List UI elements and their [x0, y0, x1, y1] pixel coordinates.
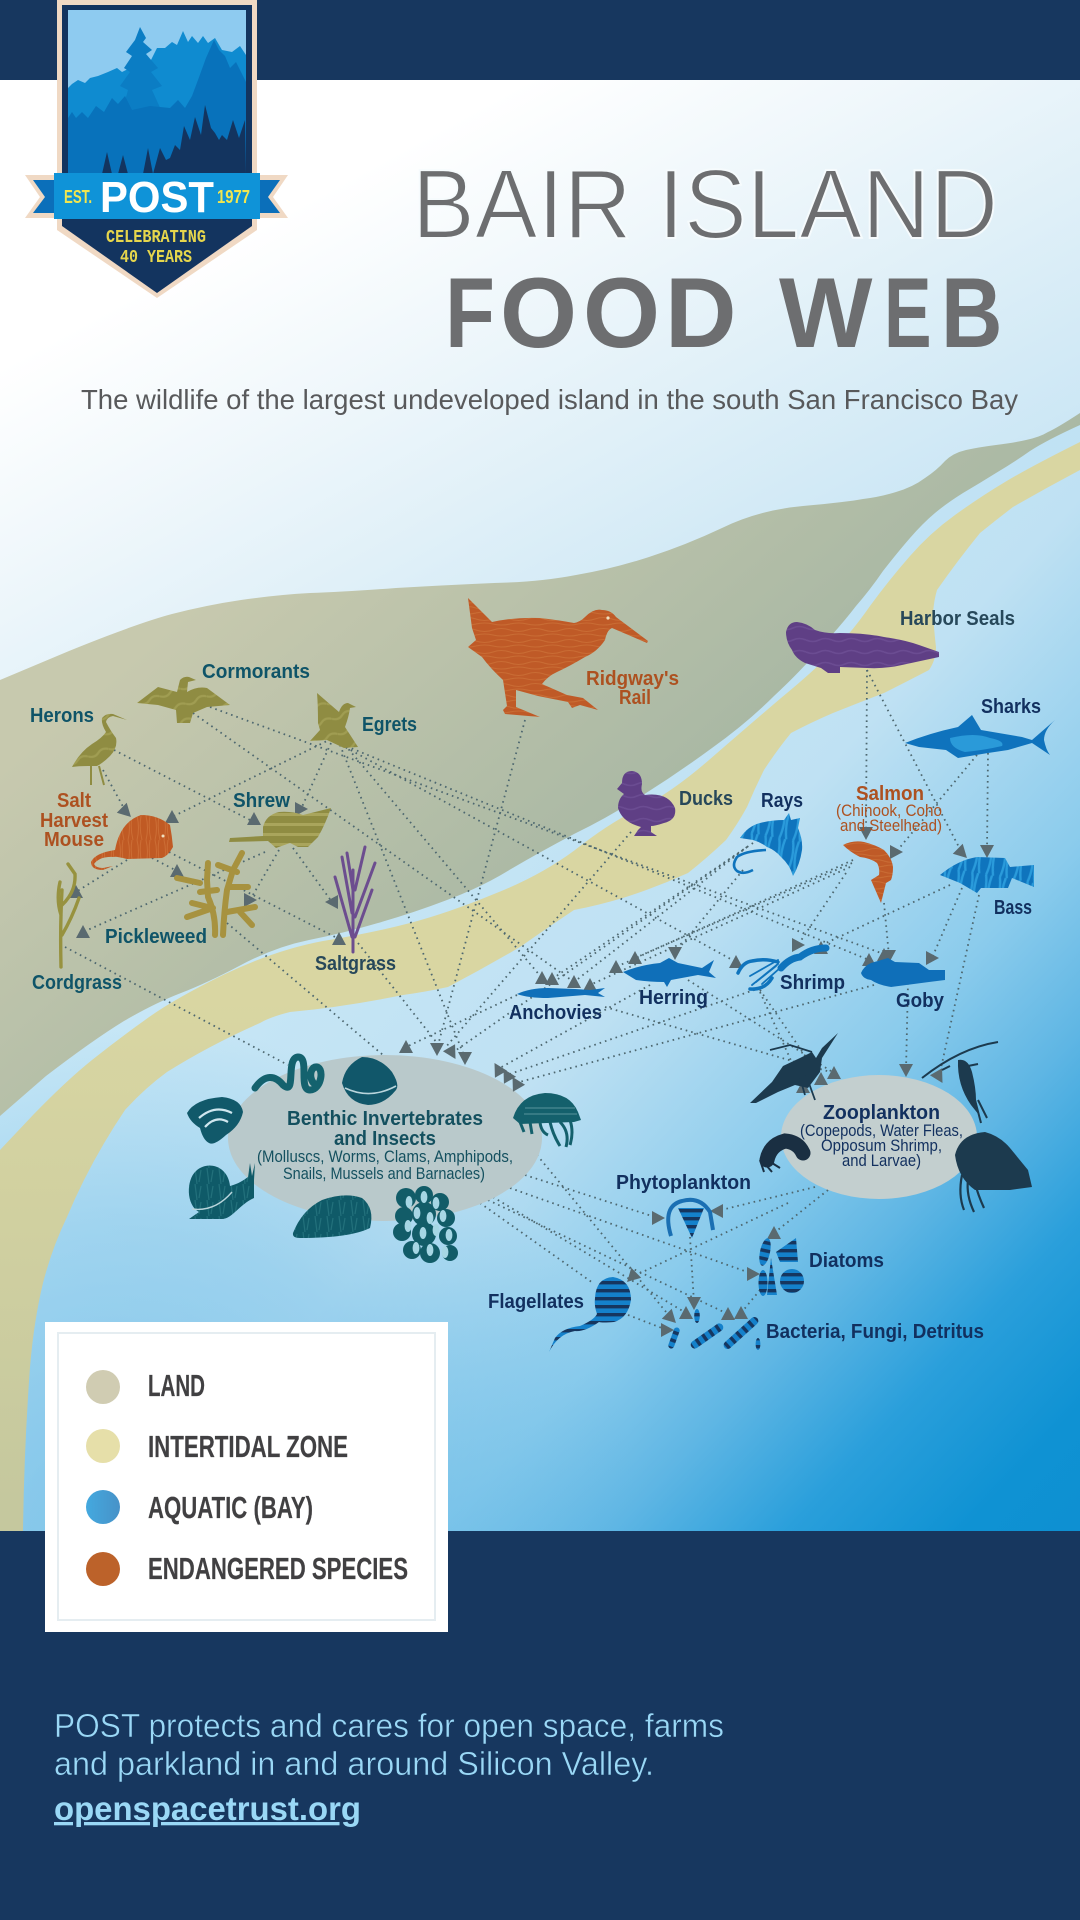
intertidal zone	[0, 442, 1080, 1532]
subtitle: The wildlife of the largest undeveloped island in the south San Francisco Bay	[81, 384, 1018, 415]
ellipse: zooplankton	[781, 1075, 977, 1199]
label: Cordgrass: Cordgrass	[32, 972, 122, 994]
title: F	[445, 258, 495, 369]
label: Bass: Bass	[994, 897, 1032, 919]
title: W	[779, 257, 873, 368]
label: Benthic Invertebrates and Insects: Snails, Mussels and Barnacles)	[283, 1164, 485, 1183]
label: Rays: Rays	[761, 790, 803, 812]
icon: Ridgway's rail	[468, 598, 648, 717]
icon: cordgrass	[58, 864, 79, 967]
title: E	[884, 259, 931, 369]
label: Bacteria, Fungi, Detritus: Bacteria, Fungi, Detritus	[766, 1321, 984, 1343]
icon: shrew	[229, 808, 331, 848]
label: Zooplankton: (Copepods, Water Fleas,	[800, 1121, 963, 1140]
label: Zooplankton: Zooplankton	[823, 1102, 940, 1124]
ellipse: benthic invertebrates	[228, 1055, 542, 1221]
top navy band	[0, 0, 1080, 81]
icon: salt harvest mouse	[91, 815, 173, 870]
label: Zooplankton: Opposum Shrimp,	[821, 1136, 942, 1155]
shield navy	[62, 5, 252, 293]
legend: aquatic bay	[86, 1490, 313, 1525]
ribbon	[54, 173, 260, 219]
label: Benthic Invertebrates and Insects: (Molluscs, Worms, Clams, Amphipods,	[257, 1147, 513, 1166]
label: Phytoplankton: Phytoplankton	[616, 1172, 751, 1194]
label: Saltgrass: Saltgrass	[315, 953, 396, 975]
land area	[0, 413, 1080, 1116]
icon: water flea	[955, 1132, 1032, 1212]
icon: duck	[617, 771, 675, 836]
footer text: POST protects and cares for open space, farms	[54, 1707, 724, 1744]
food web connecting lines	[65, 670, 988, 1330]
logo text: POST	[100, 173, 214, 222]
icon: salmon	[843, 841, 893, 903]
label: Egrets: Egrets	[362, 714, 417, 736]
label: Ridgway's Rail: Ridgway's	[586, 668, 679, 690]
aquatic bay background	[0, 420, 1080, 1532]
icon: snail	[189, 1163, 255, 1219]
title: B	[941, 257, 1002, 368]
label: Zooplankton	[800, 1102, 963, 1170]
icon: mussel	[293, 1195, 371, 1238]
label: Benthic Invertebrates and Insects	[257, 1108, 513, 1183]
label: Diatoms: Diatoms	[809, 1250, 884, 1272]
shield outline	[57, 0, 257, 298]
icon: larva	[760, 1141, 803, 1172]
icon: saltgrass	[335, 847, 375, 952]
legend: intertidal zone: INTERTIDAL ZONE	[148, 1429, 348, 1464]
label: Cormorants: Cormorants	[202, 661, 310, 683]
label: Anchovies: Anchovies	[509, 1002, 602, 1024]
legend: endangered species: ENDANGERED SPECIES	[148, 1551, 408, 1586]
icon: opossum shrimp	[750, 1033, 838, 1103]
arrowheads	[69, 802, 994, 1337]
icon: shrimp	[738, 948, 826, 989]
icon: clam	[342, 1057, 397, 1105]
title	[412, 149, 1002, 369]
icon: copepod	[922, 1042, 998, 1123]
icon: egret	[310, 693, 358, 748]
icon: harbor seal	[786, 622, 939, 673]
forest scene	[68, 10, 246, 175]
bay depth shading	[0, 1020, 640, 1532]
icon: ray	[734, 813, 802, 876]
label: Shrew: Shrew	[233, 790, 290, 812]
label: Salt Harvest Mouse: Salt	[57, 790, 91, 812]
label: Ridgway's Rail: Rail	[619, 687, 651, 709]
logo badge	[25, 0, 288, 298]
icon: phytoplankton	[668, 1200, 713, 1238]
icon: bacteria	[667, 1309, 760, 1351]
label: Harbor Seals: Harbor Seals	[900, 608, 1015, 630]
footer band	[0, 1531, 1080, 1920]
title: BAIR ISLAND	[412, 149, 998, 259]
icon: flagellate	[549, 1277, 631, 1352]
label: Herring: Herring	[639, 987, 708, 1009]
icon: pickleweed	[177, 853, 255, 935]
legend: land	[86, 1368, 205, 1404]
footer text	[54, 1707, 724, 1827]
icon: amphipod	[513, 1093, 581, 1147]
ribbon tails	[25, 175, 288, 218]
legend: land: LAND	[148, 1368, 205, 1403]
label: Salt Harvest Mouse: Harvest	[40, 810, 108, 832]
label: Ducks: Ducks	[679, 788, 733, 810]
icon: bass	[940, 857, 1034, 893]
label: Salt Harvest Mouse	[40, 790, 108, 851]
label: Zooplankton: and Larvae)	[842, 1151, 921, 1170]
footer text: openspacetrust.org	[54, 1790, 361, 1827]
label: Salmon	[836, 783, 942, 835]
label: Sharks: Sharks	[981, 696, 1041, 718]
label: Salt Harvest Mouse: Mouse	[44, 829, 104, 851]
label: Benthic Invertebrates and Insects: Benthic Invertebrates	[287, 1108, 483, 1130]
icon: shark	[905, 715, 1055, 758]
label: Herons: Herons	[30, 705, 94, 727]
icon: worm	[255, 1057, 321, 1090]
icon: goby	[861, 958, 945, 987]
icon: anchovies	[517, 988, 605, 998]
icon: barnacles	[393, 1186, 458, 1263]
label: Salmon: and Steelhead)	[840, 816, 942, 835]
legend: intertidal zone	[86, 1429, 348, 1464]
label: Shrimp: Shrimp	[780, 972, 845, 994]
label: Benthic Invertebrates and Insects: and Insects	[334, 1128, 436, 1150]
label: Ridgway's Rail	[586, 668, 679, 709]
icon: heron	[72, 714, 127, 785]
logo celebrating: CELEBRATING	[106, 228, 206, 248]
label: Flagellates: Flagellates	[488, 1291, 584, 1313]
logo est: EST.	[64, 187, 92, 207]
logo years: 40 YEARS	[120, 248, 192, 268]
icon: diatoms	[757, 1237, 804, 1296]
legend panel	[45, 1322, 448, 1632]
icon: cormorant	[137, 677, 230, 723]
label: Salmon: Salmon	[856, 783, 924, 805]
sky background	[0, 80, 1080, 680]
label: Goby: Goby	[896, 990, 945, 1012]
footer text: and parkland in and around Silicon Valley.	[54, 1745, 654, 1782]
icon: herring	[623, 958, 716, 987]
label: Salmon: (Chinook, Coho	[836, 801, 942, 820]
legend: aquatic bay: AQUATIC (BAY)	[148, 1490, 313, 1525]
logo year: 1977	[217, 187, 250, 207]
title: OOD	[500, 257, 736, 368]
label: Pickleweed: Pickleweed	[105, 926, 207, 948]
icon: shell	[187, 1097, 243, 1144]
legend: endangered species	[86, 1551, 408, 1586]
